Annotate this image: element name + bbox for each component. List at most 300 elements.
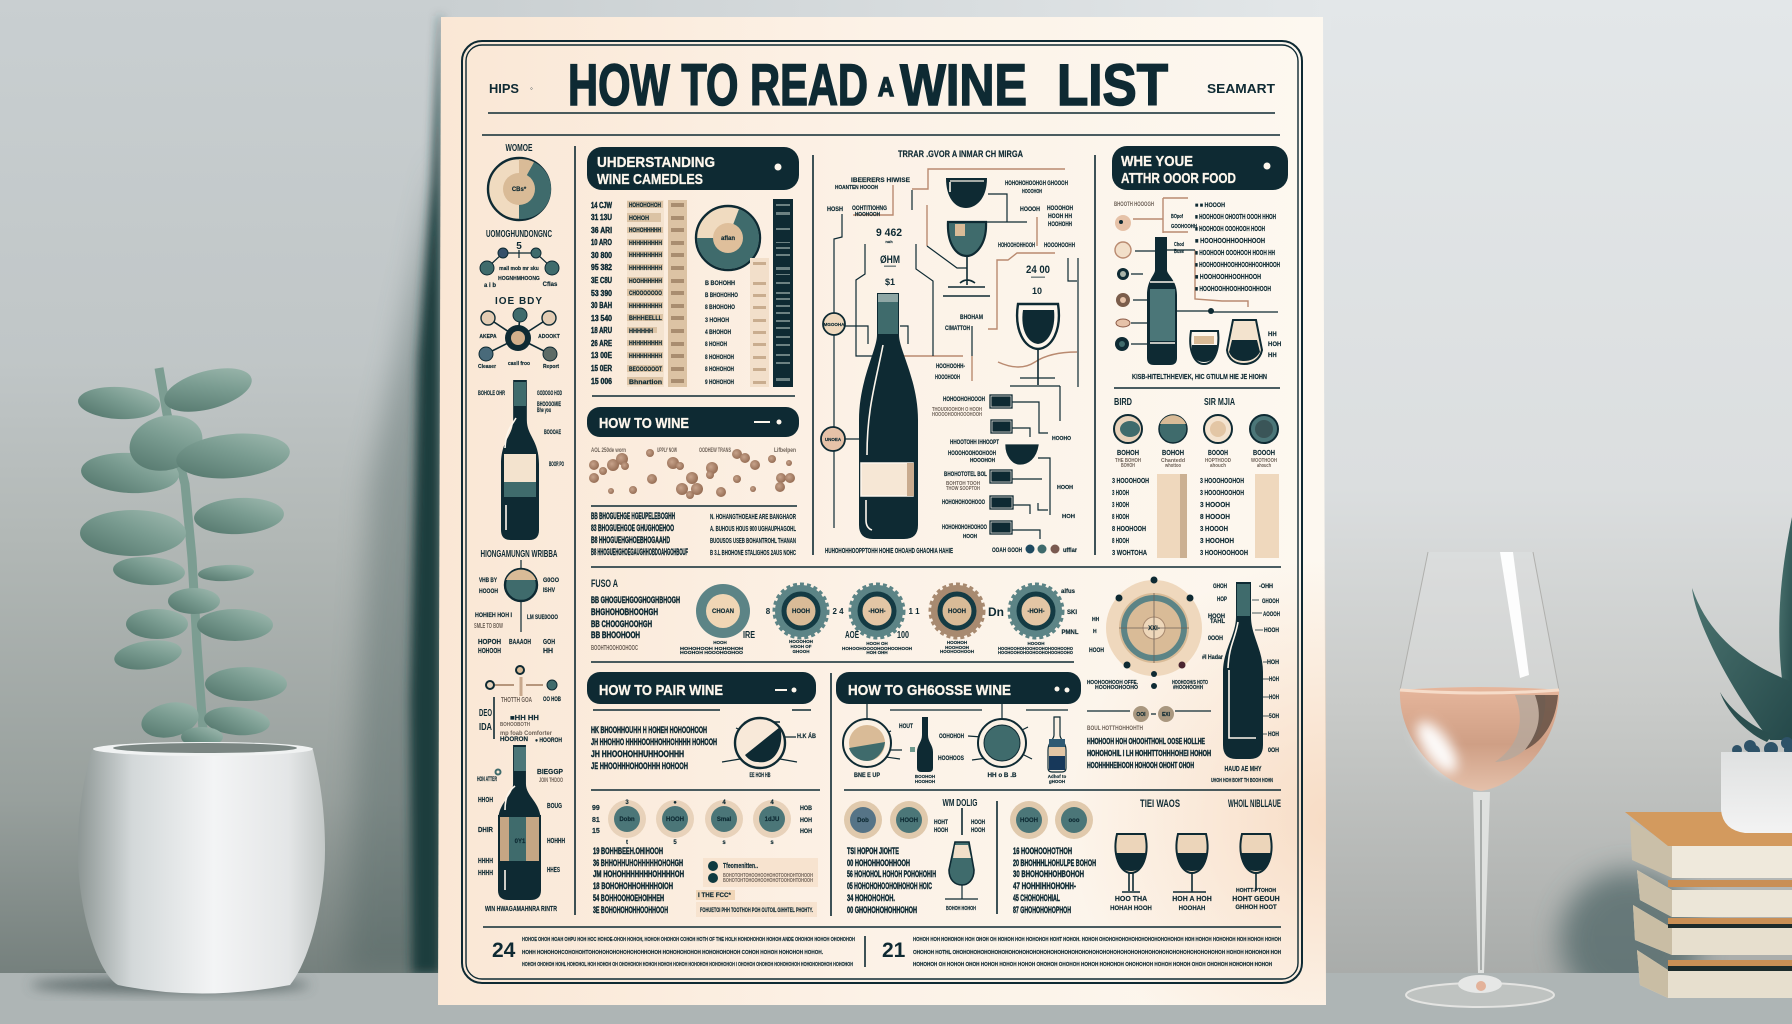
choose rows: 16 HOOHOOHOTHOH: [1013, 846, 1072, 856]
badge labels: HOOHOOHOHOOHOOHOHOOHOOHO: [998, 646, 1073, 651]
pair circles: 5: [673, 840, 677, 846]
pair circles: HOB: [800, 806, 813, 812]
footer right: 21: [882, 939, 906, 962]
footer right: HOHOHOH OH HOHOH OHOH HOHOH HOHOH HOHOH OHOHOH OHOHOH HOHOH HOHOHOH OHOHOHOH HOHOH HOHOH OHOH OHOHOH HOHOHOH HOHOH: [913, 962, 1272, 968]
food price table: 3 HOOOHOOH: [1112, 478, 1149, 485]
choose labels: Adhof to: [1048, 774, 1066, 779]
wine list table: 3E C8U: [591, 276, 612, 285]
choose labels: BNE E UP: [854, 773, 880, 779]
diagram labels: THOUOIOOHOH O HOOH: [932, 407, 982, 413]
tumblers: HOH: [1268, 342, 1281, 348]
pair circles: 99: [592, 805, 600, 812]
left column: wine pie: WOMOE: [506, 143, 533, 154]
title: [568, 53, 1168, 118]
glass c: GHHOH HOOT: [1235, 905, 1277, 911]
how to wine text rows: B 3.L BHOHONE STALIGHOS 2AUS NOHC: [710, 550, 796, 557]
tall bottle labels: HOH: [1267, 660, 1279, 666]
left column: wine pie: [486, 143, 552, 240]
header left tag: ◦: [530, 84, 533, 93]
pair circles: ●: [673, 800, 677, 806]
big bottle: [859, 293, 918, 539]
dial chart: HOOHOOH/S HOTO: [1172, 680, 1208, 686]
glass a: HOO THA: [1115, 896, 1147, 903]
pair circles: 4: [770, 800, 774, 806]
dial footer block: HOHOHOHIL I LH HOHHTTOHHHOHEI HOHOH: [1087, 749, 1211, 758]
dial chart: HOOHOOHOOHO: [1095, 685, 1138, 691]
header right tag: SEAMART: [1207, 81, 1275, 96]
choose labels: HOUT: [899, 724, 913, 730]
badge labels: Dn: [988, 605, 1004, 619]
left column: gauge: HH: [543, 648, 553, 655]
tumblers: HH: [1268, 332, 1277, 338]
shelf: [0, 973, 1792, 1024]
grape illustration: OODHEW TRANS: [699, 448, 731, 454]
heading pill: WINE CAMEDLES: [597, 171, 703, 188]
food price table: 3 HOOOH: [1200, 526, 1228, 533]
tall bottle labels: GHOOH: [1262, 599, 1279, 605]
left column: bottle two: HHOH: [478, 797, 493, 804]
left column: bottle one: BOOR PO: [549, 462, 564, 468]
left column: node diagram: mall mob mr sku: [499, 266, 539, 272]
pair callout: I THE FCC*: [698, 893, 732, 899]
how to wine text rows: BUOUSOS USEB BOHANTROHL THANAN: [710, 538, 796, 545]
tall bottle labels: -OHH: [1259, 584, 1273, 590]
heading pill: HOW TO WINE: [599, 415, 689, 432]
diagram labels: HOH: [1062, 514, 1075, 520]
badge labels: IRE: [743, 630, 755, 641]
dial chart: HOOH: [1089, 648, 1104, 654]
left column: bottle two: HON ATTER: [477, 777, 497, 783]
glass c: [1232, 834, 1280, 911]
pair circles: [592, 800, 813, 846]
choose bottle one: [910, 717, 933, 772]
food boxes: [990, 395, 1038, 534]
diagram labels: BHOHOTOTEL BOL: [944, 472, 987, 478]
pair circles: 1dJU: [765, 817, 779, 823]
left column: gauge: VHB BY: [479, 578, 497, 584]
wine list table: 15 006: [591, 377, 612, 386]
how to wine text rows: [591, 511, 796, 557]
food price table: 3 HOOH: [1112, 502, 1129, 509]
circle captions: [1115, 450, 1277, 469]
left column: bottle one: BOOOAE: [544, 430, 561, 436]
left column: gauge: [474, 549, 559, 655]
wine list table: BHHHEELLL: [629, 316, 662, 322]
tumblers: HH: [1268, 353, 1277, 359]
label callouts: MGOOHA: [824, 322, 845, 327]
pair circles: HOOH: [666, 817, 684, 823]
choose circles: [844, 801, 1093, 839]
pairing rows: ■ HOOHOOHHOOHHOOH: [1195, 274, 1261, 281]
diagram labels: HOOOOHOOHOOOHOOH: [932, 412, 982, 418]
left column: bottle two: [477, 745, 565, 913]
pair text rows: JH HHOHHO HHHHOOHHOHHOHHHH HOHOOH: [591, 737, 717, 747]
secondary list: B BHOHOHHO: [705, 293, 738, 299]
diagram labels: HOOHOOH: [855, 212, 880, 218]
left column: body hub: AKEPA: [479, 334, 497, 340]
potted plant: [30, 360, 325, 994]
left column: notes box: OO HOB: [543, 697, 561, 703]
wine list table: 13 00E: [591, 351, 613, 360]
price labels: ------: [884, 264, 896, 270]
circle captions: BOOOH: [1208, 450, 1228, 457]
choose circles: ooo: [1068, 818, 1080, 824]
diagram labels: HOHOHOHOHOOHOO: [942, 525, 987, 531]
wine list table: 53 390: [591, 289, 612, 298]
poster: [438, 17, 1326, 1005]
tall bottle labels: AOOOH: [1263, 612, 1280, 618]
dial footer block: OOI: [1136, 712, 1146, 718]
wine list table: 15 0ER: [591, 364, 612, 373]
wine list table: 30 800: [591, 251, 612, 260]
heading pill: WHE YOUE: [1121, 153, 1193, 170]
food bottle: Chod: [1174, 242, 1184, 248]
diagram labels: BOHTOH TOOH: [946, 481, 980, 487]
header left tag: [489, 81, 533, 96]
footer right: HOHOH HOH HOHOHOH HOH OHOH OH HOHOH HOH HOHOHOH HOHT HOHOH. HOHOH OHOHOHOHOHOHOHOHOHOHOHOHOH HOH HOHOH HOHOHOH HOH HOHOH HOHOH: [913, 937, 1281, 943]
choose rows: 34 HOHOHOHOH.: [847, 893, 895, 903]
badge labels: HOH OHH: [866, 650, 888, 655]
fuso text rows: BOOHTHOOHOOHOOC: [591, 645, 638, 652]
diagram labels: HOOOHOH: [970, 458, 995, 464]
diagram labels: HOOOHOOH: [935, 375, 960, 381]
left column: notes box: ■HH HH: [510, 715, 539, 722]
circle captions: BOHOH: [1121, 463, 1135, 469]
heading pill: [587, 147, 799, 190]
food bottle: Buse: [1174, 249, 1184, 255]
badge three: [850, 584, 904, 638]
food price table: 3 HOOOH: [1200, 502, 1230, 509]
glass one: [946, 178, 987, 208]
choose labels: OOHOHOH: [939, 734, 964, 740]
dial chart: HH: [1092, 617, 1100, 623]
diagram labels: HOHOHOHOOHOOO: [942, 500, 985, 506]
glass b: HOH A HOH: [1172, 896, 1212, 903]
left column: node diagram: [480, 241, 559, 289]
circle captions: Chantedd: [1161, 458, 1185, 464]
badge labels: HOOHOH: [947, 640, 967, 645]
wine list table: HOOHHHHHH: [629, 279, 662, 285]
badge labels: HOHOOHOOOOHOOHOOHOOH: [842, 646, 912, 651]
camedles pie chart: [696, 206, 760, 270]
panel: fuso tasting badges: FUSO A: [591, 578, 618, 590]
sub headings: [1114, 397, 1235, 408]
pair rows: 18 BOHOHOHHOHHHHOIOH: [593, 881, 673, 891]
footer left: HOHOH OHOHOH HOHL HOHOHOL HOH HOHOH OH OHOHOHOH HOHOH HOHOH HOHOH HOHOHOH HOHOHOHOH I OHOHOH OHOHOH HOHOHOHOH HOHOHOHOHOH HOHOHOH: [522, 962, 853, 968]
circle captions: ahouch: [1210, 463, 1226, 469]
how to wine text rows: BB BHOGUEHGE HGEUPELEBOGHH: [591, 511, 675, 521]
left column: bottle one: [478, 380, 564, 540]
panel: wine anatomy diagram: [821, 149, 1078, 555]
tall bottle labels: UHOH HOH BOHT TH BOOH HOHN: [1211, 778, 1273, 784]
diagram labels: HOHOOHOHHOOH: [998, 243, 1035, 249]
diagram labels: IBEERERS HIWISE: [851, 178, 910, 184]
left column: notes box: IDA: [479, 722, 492, 733]
carafe: HOOH: [971, 820, 985, 826]
panel: three wine glasses: TIEI WAOS: [1140, 798, 1180, 810]
pairing rows: ■ ■ HOOOH: [1195, 203, 1225, 209]
badge two: HOOH: [792, 609, 810, 615]
dial footer block: HHOHOOH HOH OHOOHTHOHL OOSE HOLLHE: [1087, 737, 1205, 746]
heading pill: [587, 407, 799, 437]
left column: gauge: SMLE TO BOW: [474, 623, 503, 630]
left column: notes box: ● HOOROH: [535, 738, 562, 744]
heading pill: ATTHR OOOR FOOD: [1121, 170, 1236, 187]
badge four: [930, 584, 984, 638]
secondary list: 8 HOHOHOH: [705, 355, 734, 361]
circle captions: BOHOH: [1162, 450, 1184, 457]
how to wine text rows: A. BUHOUS HOUS 900 UGHAUPHAGOHL: [710, 526, 796, 533]
wine list table: HHHHHH: [629, 329, 653, 335]
wine list table: BEOOOOOOT: [629, 367, 662, 373]
left column: gauge: HOPOH: [478, 639, 501, 646]
how to wine text rows: B8 HHOGUEHGHOEGAUGHHOBDOAHGOHBOUF: [591, 547, 688, 557]
heading pill: UHDERSTANDING: [597, 154, 715, 171]
left column: bottle two: DHIR: [478, 827, 493, 834]
wine list table: HHHHHHHHH: [629, 354, 662, 360]
pairing rows: [1195, 203, 1280, 293]
glass c: HOHT GEOUH: [1232, 896, 1280, 903]
pair callout: BOHOTOHTOHOOHOOHOHOTOOHOHTOHOOH: [723, 878, 813, 884]
left column: bottle one: Bhe you: [537, 408, 551, 414]
wine list table: 14 CJW: [591, 201, 612, 210]
food price table: 3 HOOH: [1112, 490, 1129, 497]
badge labels: PMNL: [1062, 630, 1079, 636]
wine list table: 36 ARI: [591, 226, 612, 235]
food price table: 8 HOOH: [1112, 514, 1129, 521]
left column: bottle two: BIEGGP: [537, 769, 563, 776]
tall bottle labels: HOOH: [1264, 628, 1279, 634]
left column: gauge: G0OO: [543, 578, 559, 584]
wine list table: 31 13U: [591, 213, 612, 222]
pair text rows: JH HHOOHOHHUHHOOHHH: [591, 749, 684, 759]
badge labels: AOE: [845, 630, 859, 641]
secondary list: 9 HOHOHOH: [705, 380, 734, 386]
tall bottle labels: HOP: [1217, 597, 1227, 603]
badge five: [1009, 584, 1063, 638]
choose rows: 45 CHOHOHOHIAL: [1013, 893, 1060, 903]
circle captions: WOOTHOOH: [1251, 458, 1277, 464]
left column: node diagram: HOGNHMHOONG: [498, 276, 540, 282]
food price table: 3 HOOOHOOHOH: [1200, 478, 1244, 485]
stack of books: [1625, 812, 1792, 998]
badge labels: GHOOH: [792, 649, 810, 654]
food price table: 3 WOHTOHA: [1112, 550, 1147, 557]
diagram labels: HOOHOHH: [1048, 222, 1072, 228]
diagram labels: HOSH: [827, 207, 843, 213]
pair callout: [696, 858, 818, 917]
left column: bottle two: 0Y1: [515, 839, 526, 845]
badge labels: HOOH: [713, 640, 727, 645]
title: HOW TO READ: [568, 53, 868, 118]
title: A: [878, 72, 894, 102]
tall bottle labels: 0OOH: [1208, 636, 1223, 642]
diagram labels: BHOHAM: [960, 315, 983, 321]
footer right: [882, 937, 1281, 968]
pair circles: s: [770, 840, 774, 846]
dial footer block: EXI: [1162, 712, 1171, 718]
how to wine text rows: B8 HHOGUEHGHOEBHOGAAHD: [591, 535, 670, 545]
food icons: [1114, 202, 1197, 351]
food icons: BOpof: [1171, 214, 1183, 220]
tall bottle labels: HOH: [1269, 677, 1279, 683]
badge labels: alfus: [1061, 589, 1076, 595]
pair dial: [722, 718, 817, 779]
tumblers: [1190, 320, 1281, 364]
panel: three wine glasses: WHOIL NIBLLAUE: [1228, 798, 1281, 810]
left column: gauge: ISHV: [543, 588, 555, 594]
wine list table: HHHHHHHHH: [629, 241, 662, 247]
wine list table: Bhnartion: [629, 380, 662, 386]
glass a: HOHAH HOOH: [1110, 906, 1152, 912]
price labels: 10: [1032, 286, 1042, 296]
food price table: 8 HOOH: [1112, 538, 1129, 545]
connector lines: [1131, 198, 1278, 344]
diagram labels: HOOOHOOHH: [1044, 243, 1075, 249]
glass c: HOHTT-PTOHOH: [1236, 888, 1276, 894]
fuso text rows: [591, 595, 680, 652]
pair circles: Dobn: [619, 817, 635, 823]
left column: body hub: ADOOKT: [538, 334, 560, 340]
left column: notes box: HOORON: [500, 737, 528, 743]
camedles pie chart: aflan: [721, 236, 735, 242]
circle captions: BOOOH: [1253, 450, 1275, 457]
left column: bottle one: BHOOGOMIE: [537, 402, 561, 408]
left column: bottle two: HHHH: [478, 870, 493, 877]
left column: node diagram: 5: [516, 241, 522, 252]
wine list table: 95 382: [591, 263, 612, 272]
carafe: HOHT: [934, 820, 948, 826]
left column: gauge: GOH: [543, 639, 555, 646]
pair text rows: JE HHOOHHHOHOOHHH HOHOOH: [591, 761, 688, 771]
dial footer block: BOUL HOTTHOHHOHTH: [1087, 726, 1143, 732]
pair rows: [593, 846, 684, 915]
tall bottle labels: HOOH: [1208, 614, 1225, 620]
badge labels: HOOHOOH: [945, 645, 969, 650]
panel: what your order food: [1112, 146, 1288, 558]
price labels: ØHM: [880, 254, 900, 266]
sub headings: SIR MJIA: [1204, 397, 1235, 408]
food price table: 8 HOOOH: [1200, 514, 1230, 521]
wine list table: 30 BAH: [591, 301, 612, 310]
label callouts: [821, 313, 845, 451]
left column: gauge: LM SUE0OOO: [527, 615, 558, 621]
choose rows: TSI HOPOH JIOHTE: [847, 846, 899, 856]
choose rows: 05 HOHOHOHOOHOIHOHOH HOIC: [847, 881, 932, 891]
diagram labels: [827, 178, 1075, 540]
tall bottle labels: HAUD AE MHY: [1224, 766, 1262, 773]
heading pill: HOW TO PAIR WINE: [599, 682, 723, 699]
wine list table: 10 ARO: [591, 238, 612, 247]
choose labels: [854, 724, 1066, 784]
pair rows: 19 BOHHBEEH.OHIHOOH: [593, 846, 663, 856]
circle captions: whottoo: [1164, 463, 1181, 469]
choose labels: BOOHOH: [915, 774, 935, 779]
secondary list: B BOHOHH: [705, 281, 735, 287]
left column: bottle two: HOHHH: [547, 838, 565, 845]
choose rows: 87 GHOHOHOHOPHOH: [1013, 905, 1071, 915]
food price table: 3 HOOHOOHOOH: [1200, 550, 1248, 557]
fuso text rows: BB GHOGUEHGOGHOGHBHOGH: [591, 595, 680, 605]
left column: notes box: THOTTH GOA: [501, 697, 532, 704]
left column: gauge: HOOOH: [479, 589, 498, 595]
diagram labels: HOOOHOH: [1022, 189, 1042, 195]
tall bottle labels: #I Hadar: [1202, 655, 1224, 661]
diagram labels: HOOH: [963, 534, 977, 540]
secondary list: 3 HOHOH: [705, 318, 729, 324]
pairing rows: ■ HOOHOOH OHOOTH OOOH HHOH: [1195, 214, 1276, 221]
heading pill: [836, 672, 1081, 704]
diagram footer: ufflar: [1063, 548, 1078, 554]
glass two: [943, 222, 990, 296]
choose rows: 00 GHOHOHOHOHHOHOH: [847, 905, 917, 915]
heading pill: [587, 672, 816, 704]
left column: body hub: Cleaser: [478, 364, 496, 370]
wine list table: 18 ARU: [591, 326, 612, 335]
diagram labels: HHOOTOHH IHHOOPT: [950, 440, 999, 446]
title: LIST: [1057, 53, 1168, 118]
food price table: 8 HOOHOOH: [1112, 526, 1146, 533]
left column: bottle two: HHHH: [478, 858, 493, 865]
pairing rows: ■ HOOHOOHHOOHHOOHHOOHHOOH: [1195, 262, 1280, 269]
badge labels: HOHOHOOH HOHOHOH: [680, 646, 743, 651]
fuso text rows: BB BHOOHOOH: [591, 630, 640, 640]
badge five: -HOH-: [1027, 609, 1045, 615]
footer left: HOHOE OHOH HOAH OHPU HOH HOC HOHOE-OHOH HOHOH, HOHOH OHOHOH COHOH HOTH OF THE HOLH HOHOHOHOH HOHOH ANDE OHOHOH HOHOH OHOHOHOH: [522, 937, 855, 943]
wine list table: CHOOOOOOO: [629, 291, 662, 297]
choose labels: gHOOH: [1049, 779, 1065, 784]
wine list table: HHHHHHHHH: [629, 253, 662, 259]
wine list table: HOHOHOHOH: [629, 203, 661, 209]
tall bottle: [1223, 582, 1269, 759]
left column: body hub: [478, 296, 560, 370]
diagram labels: HOHOOHOHOOOH: [943, 397, 985, 403]
dial footer block: HOOHHHHEIHOOH HOHOOH OHOHT OHOH: [1087, 761, 1194, 770]
left column: node diagram: Cflas: [543, 282, 558, 288]
left column: bottle one: BOHOLE OHR: [478, 391, 505, 397]
pair callout: FOHUETOI PHH TOOTHOH POH OUTOIL GIHHTEL PHOHTY.: [700, 908, 813, 914]
panel: how to pair wine: [587, 672, 818, 917]
heading pill: HOW TO GH6OSSE WINE: [848, 682, 1011, 699]
badge three: -HOH-: [868, 609, 886, 615]
badge labels: HOOHOOHOOH: [940, 649, 974, 654]
badge one: [696, 584, 750, 638]
pair callout: BOHOTOHTOHOOHOOHOHOTOOHOHTOHOOH: [723, 873, 813, 879]
left column: body hub: Report: [543, 364, 559, 370]
left column: bottle two: WIN HWAGAMAHNRA RINTR: [485, 906, 557, 913]
wine glass: [1400, 552, 1559, 1007]
glass three: [1017, 304, 1059, 385]
panel: understanding wine camedles: [587, 147, 799, 387]
pairing rows: ■ HOOHOOHHOOHHOOHHOOH: [1195, 286, 1271, 293]
pair circles: Smal: [717, 817, 732, 823]
left column: gauge: BAAAOH: [509, 639, 531, 646]
circle captions: HOPTHOOD: [1205, 458, 1231, 464]
dial chart: [1087, 576, 1208, 691]
pair rows: JM HOHOHHHHHHHOHHHHOH: [593, 869, 684, 879]
pair rows: 3E BOHOHOHOHHOOHHOOH: [593, 905, 668, 915]
tall bottle labels: GHOH: [1213, 584, 1227, 590]
choose labels: HOOHOOS: [938, 756, 964, 762]
diagram labels: HOOOH: [1020, 207, 1040, 213]
carafe: WM DOLIG: [942, 798, 978, 809]
dial chart: #HOOHOOHH: [1173, 685, 1203, 691]
glass b: HOOHAH: [1179, 906, 1205, 912]
panel: fuso tasting badges: [591, 578, 1079, 655]
diagram labels: HOOHOOHH-: [936, 364, 965, 370]
badge labels: HOOH OH: [866, 641, 888, 646]
food icons: GOOHOOHH: [1171, 224, 1197, 230]
